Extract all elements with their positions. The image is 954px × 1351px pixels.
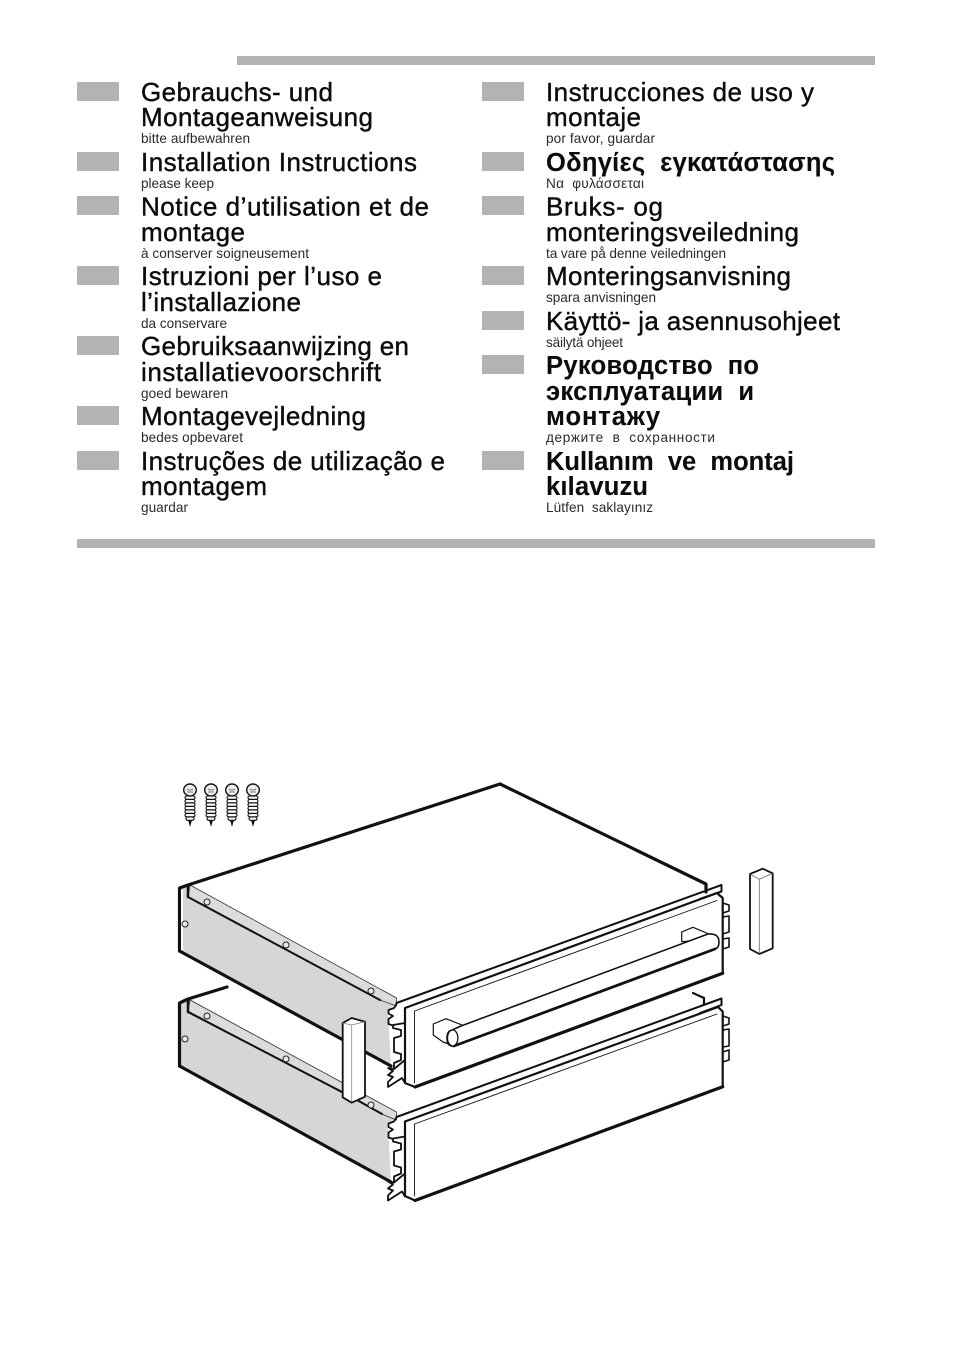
entry: German: bitte aufbewahren xyxy=(141,131,250,146)
illustration: stacked warming drawers with screws and posts xyxy=(180,784,773,1200)
entry: German: Gebrauchs- und xyxy=(141,77,333,107)
entry: Danish xyxy=(77,401,366,445)
top divider bar xyxy=(237,56,875,65)
lower drawer top surface xyxy=(190,987,714,1112)
entry: German: Montageanweisung xyxy=(141,102,373,132)
screw 4 xyxy=(247,784,259,827)
entry: French: à conserver soigneusement xyxy=(141,246,309,261)
entry: Spanish: Instrucciones de uso y xyxy=(546,77,814,107)
entry: Russian: эксплуатации и xyxy=(546,378,754,406)
entry: Turkish: Lütfen saklayınız xyxy=(546,500,653,515)
bottom divider bar xyxy=(77,539,875,548)
entry: Dutch: Gebruiksaanwijzing en xyxy=(141,331,409,361)
entry: Italian xyxy=(77,261,382,331)
upper drawer right tabs xyxy=(723,903,729,949)
centre connecting post xyxy=(343,1018,365,1103)
drawer handle xyxy=(433,927,719,1046)
icon: four screws xyxy=(184,784,259,827)
entry: Greek: Οδηγίες εγκατάστασης xyxy=(546,149,835,177)
entry: French xyxy=(77,192,429,261)
entry: French: montage xyxy=(141,217,245,247)
entry: Spanish: por favor, guardar xyxy=(546,131,655,146)
entry: Italian: l’installazione xyxy=(141,287,301,317)
entry: Finnish: Käyttö- ja asennusohjeet xyxy=(546,306,841,336)
upper drawer rivets xyxy=(182,899,374,994)
entry: Danish: bedes opbevaret xyxy=(141,430,243,445)
entry: Norwegian: Bruks- og xyxy=(546,192,663,222)
lower drawer right tabs xyxy=(723,1016,729,1062)
entry: Turkish: kılavuzu xyxy=(546,473,648,501)
entry: Portuguese: montagem xyxy=(141,471,267,501)
entry: Dutch: installatievoorschrift xyxy=(141,357,382,387)
entry: Spanish: montaje xyxy=(546,102,641,132)
handle end cap xyxy=(448,1030,458,1046)
entry: Norwegian: monteringsveiledning xyxy=(546,217,799,247)
upper drawer notched joint xyxy=(388,1004,405,1087)
entry: Danish: Montagevejledning xyxy=(141,401,366,431)
entry: Greek: Να φυλάσσεται xyxy=(546,176,644,191)
entry: English: Installation Instructions xyxy=(141,147,417,177)
right column language list xyxy=(482,77,841,515)
upper drawer xyxy=(180,784,729,1087)
entry: English xyxy=(77,147,417,191)
entry: Russian: держите в сохранности xyxy=(546,430,715,445)
entry: Swedish: Monteringsanvisning xyxy=(546,261,791,291)
entry: Finnish: säilytä ohjeet xyxy=(546,335,623,350)
entry: Turkish xyxy=(482,448,794,515)
entry: Italian: Istruzioni per l’uso e xyxy=(141,261,382,291)
entry: Norwegian: ta vare på denne veiledningen xyxy=(546,246,726,261)
handle bar xyxy=(447,934,719,1046)
screw 3 xyxy=(226,784,238,827)
lower drawer rivets xyxy=(182,1013,374,1108)
entry: German xyxy=(77,77,373,146)
right connecting post xyxy=(750,869,773,954)
entry: Greek xyxy=(482,149,835,191)
entry: Italian: da conservare xyxy=(141,316,227,331)
screw 1 xyxy=(184,784,196,827)
entry: English: please keep xyxy=(141,176,214,191)
entry: Finnish xyxy=(482,306,841,350)
entry: Norwegian xyxy=(482,192,799,261)
entry: Swedish xyxy=(482,261,791,305)
entry: Portuguese: guardar xyxy=(141,500,188,515)
upper drawer top surface xyxy=(188,784,707,1003)
entry: Turkish: Kullanım ve montaj xyxy=(546,448,794,476)
lower drawer notched joint xyxy=(388,1118,405,1200)
lower drawer front panel xyxy=(405,1007,723,1200)
screw 2 xyxy=(205,784,217,827)
lower drawer xyxy=(180,987,729,1200)
handle front mount xyxy=(433,1019,462,1045)
entry: French: Notice d’utilisation et de xyxy=(141,192,429,222)
entry: Russian: монтажу xyxy=(546,403,661,431)
handle rear mount xyxy=(682,927,709,942)
entry: Portuguese: Instruções de utilização e xyxy=(141,446,445,476)
upper drawer side panel xyxy=(180,885,396,1066)
entry: Swedish: spara anvisningen xyxy=(546,290,656,305)
entry: Portuguese xyxy=(77,446,445,515)
entry: Spanish xyxy=(482,77,814,146)
entry: Russian xyxy=(482,352,759,445)
entry: Dutch xyxy=(77,331,409,401)
entry: Dutch: goed bewaren xyxy=(141,386,228,401)
entry: Russian: Руководство по xyxy=(546,352,759,380)
left column language list xyxy=(77,77,445,515)
lower drawer side panel xyxy=(180,999,396,1182)
upper drawer front panel xyxy=(405,893,723,1087)
